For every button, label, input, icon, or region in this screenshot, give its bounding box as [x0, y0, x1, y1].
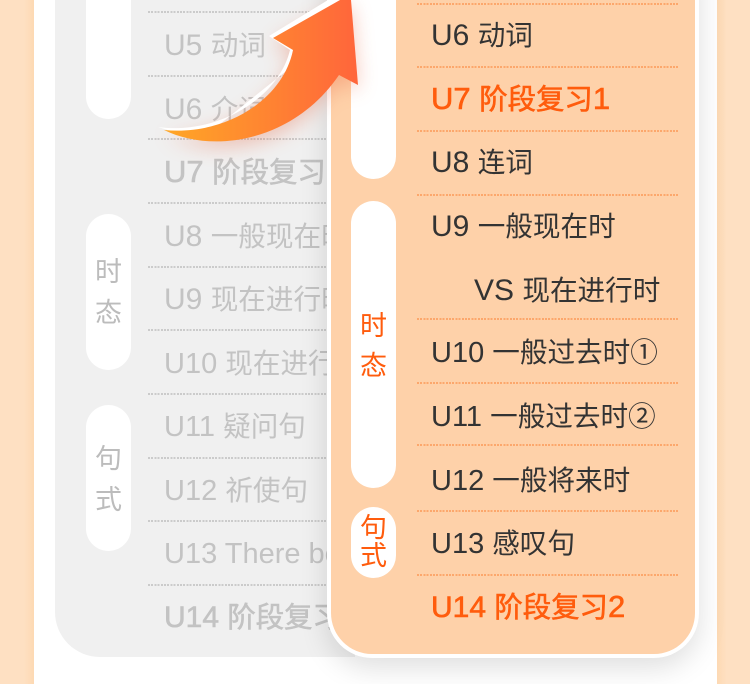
- peach panel background: [327, 0, 699, 658]
- category label: 态: 态: [95, 298, 122, 328]
- gray panel background: [55, 0, 355, 657]
- category label: 句: 句: [360, 513, 387, 543]
- row: U14 highlight: U14 阶段复习2: [431, 589, 625, 624]
- arrow shadow: [163, 6, 358, 146]
- category pill: top: [351, 0, 396, 179]
- row: U8: U8 一般现在时: [164, 220, 349, 253]
- category pill: tense: [351, 201, 396, 488]
- category pill: sentence: [86, 405, 131, 551]
- row: U9: U9 现在进行时: [164, 283, 349, 316]
- category label: 式: 式: [360, 541, 387, 571]
- row: U11: U11 疑问句: [164, 411, 306, 443]
- category label: 态: 态: [360, 351, 387, 381]
- row: U6: U6 动词: [431, 19, 533, 52]
- row: U6: U6 介词: [164, 93, 266, 126]
- category label: 句: 句: [95, 444, 122, 474]
- row: U10: U10 现在进行时: [164, 348, 363, 380]
- row: U7 highlight: U7 阶段复习1: [431, 81, 610, 116]
- category pill: sentence: [351, 507, 396, 578]
- row: U11: U11 一般过去时②: [431, 401, 656, 433]
- category pill: tense: [86, 214, 131, 370]
- left page margin band: [0, 0, 34, 684]
- category label: 时: 时: [95, 257, 122, 287]
- category label: 式: 式: [95, 485, 122, 515]
- row: U12: U12 一般将来时: [431, 465, 630, 497]
- row: U9 continued: VS 现在进行时: [474, 274, 660, 307]
- category label: 时: 时: [360, 311, 387, 341]
- row: U12: U12 祈使句: [164, 475, 308, 507]
- category pill: top: [86, 0, 131, 119]
- arrow body: [164, 0, 358, 141]
- row: U14: U14 阶段复习2: [164, 599, 358, 634]
- row: U13: U13 There be: [164, 538, 341, 570]
- row: U5: U5 动词: [164, 29, 266, 62]
- row: U9: U9 一般现在时: [431, 210, 616, 243]
- row: U7: U7 阶段复习1: [164, 154, 343, 189]
- right page margin band: [717, 0, 750, 684]
- arrow white outline: [158, 0, 351, 140]
- row: U13: U13 感叹句: [431, 528, 575, 560]
- row: U10: U10 一般过去时①: [431, 337, 658, 369]
- row: U8: U8 连词: [431, 146, 533, 179]
